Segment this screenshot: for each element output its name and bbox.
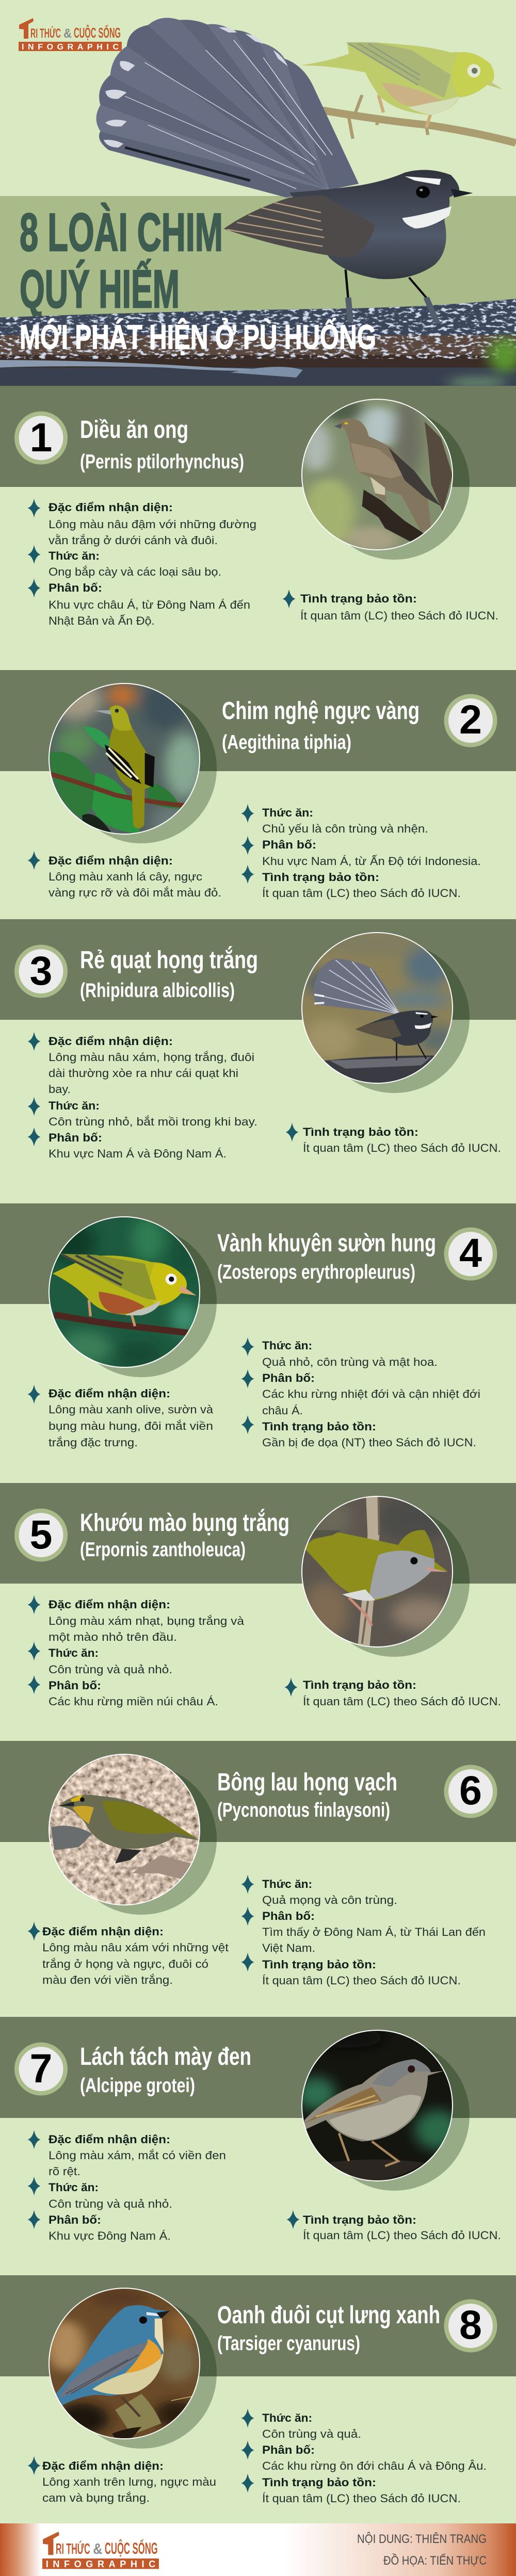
text: range: Phân bố: bbox=[49, 581, 102, 594]
text: identification: Đặc điểm nhận diện: bbox=[49, 1387, 170, 1400]
number badge 5: 5 bbox=[30, 1511, 52, 1557]
panel: species 7 bbox=[0, 2017, 516, 2242]
text: range bbox=[28, 579, 250, 627]
text: identification: Lông màu nâu đậm với những đường bbox=[49, 518, 256, 531]
illustration: white-eye bird on branch bbox=[299, 42, 516, 143]
band bbox=[0, 1203, 516, 1304]
text: conservation: Tình trạng bảo tồn: bbox=[262, 1958, 376, 1971]
tail fan bbox=[96, 18, 359, 198]
text: conservation bbox=[241, 1953, 461, 1987]
photo: white-bellied erpornis bbox=[302, 1497, 452, 1646]
text: identification: vằn trắng ở dưới cánh và đuôi. bbox=[49, 534, 218, 547]
logo: Tri thuc va Cuoc song infographic: & bbox=[63, 26, 72, 41]
panel: species 5 bbox=[0, 1483, 516, 1708]
text: food: Côn trùng và quả nhỏ. bbox=[49, 1663, 172, 1676]
text: food: Quả nhỏ, côn trùng và mật hoa. bbox=[262, 1356, 438, 1368]
text: range: Phân bố: bbox=[49, 2213, 101, 2226]
species name: Lách tách mày đen bbox=[80, 2043, 251, 2070]
logo: Tri thuc va Cuoc song infographic: RI THỨC bbox=[30, 25, 61, 41]
text: identification: Đặc điểm nhận diện: bbox=[49, 1598, 170, 1611]
text: identification: bay. bbox=[49, 1083, 71, 1096]
text: range: Khu vực Nam Á, từ Ấn Độ tới Indonesia. bbox=[262, 855, 481, 868]
text: conservation: Tình trạng bảo tồn: bbox=[262, 1420, 376, 1433]
text: range: châu Á. bbox=[262, 1404, 303, 1417]
text: range: Phân bố: bbox=[262, 838, 316, 851]
text: conservation bbox=[283, 589, 498, 622]
text: range bbox=[28, 2210, 171, 2242]
title line 3: MỚI PHÁT HIỆN Ở PÙ HUỐNG bbox=[20, 318, 376, 356]
number badge 3: 3 bbox=[30, 948, 52, 993]
text: food: Thức ăn: bbox=[262, 1878, 312, 1890]
text: range: Nhật Bản và Ấn Độ. bbox=[49, 614, 155, 627]
text: range: Khu vực Nam Á và Đông Nam Á. bbox=[49, 1147, 227, 1160]
text: food: Chủ yếu là côn trùng và nhện. bbox=[262, 822, 428, 835]
text: identification: một mào nhỏ trên đầu. bbox=[49, 1631, 177, 1643]
text: conservation: Tình trạng bảo tồn: bbox=[262, 2476, 376, 2489]
text: conservation: Tình trạng bảo tồn: bbox=[300, 592, 417, 605]
photo ring bbox=[49, 1217, 200, 1367]
text: food: Côn trùng và quả. bbox=[262, 2427, 361, 2440]
text: conservation bbox=[241, 1415, 476, 1449]
text: identification: trắng ở họng và ngực, đuôi có bbox=[42, 1958, 208, 1970]
number badge 4 bbox=[444, 1228, 497, 1280]
panel: footer bbox=[0, 2523, 516, 2576]
number badge 6: 6 bbox=[459, 1767, 482, 1813]
panel: species 2 bbox=[0, 670, 516, 900]
text: conservation: Ít quan tâm (LC) theo Sách đỏ IUCN. bbox=[300, 609, 498, 622]
text: food bbox=[28, 1641, 172, 1676]
text: identification bbox=[28, 851, 221, 899]
text: conservation bbox=[241, 865, 461, 900]
text: conservation bbox=[285, 1677, 501, 1708]
text: identification bbox=[28, 2456, 216, 2504]
credit: content: NỘI DUNG: THIÊN TRANG bbox=[357, 2532, 487, 2546]
text: conservation bbox=[241, 2474, 461, 2505]
species name: Bông lau họng vạch bbox=[217, 1769, 397, 1796]
panel: species 3 bbox=[0, 919, 516, 1160]
text: conservation bbox=[286, 1122, 501, 1154]
wing bbox=[224, 195, 375, 257]
photo ring bbox=[49, 683, 200, 834]
text: range: Khu vực châu Á, từ Đông Nam Á đến bbox=[49, 598, 250, 611]
text: identification bbox=[28, 1595, 245, 1643]
photo shadow bbox=[319, 2040, 470, 2191]
number badge 1: 1 bbox=[30, 414, 52, 460]
number badge 6 bbox=[444, 1765, 497, 1818]
number badge 7: 7 bbox=[30, 2045, 52, 2091]
photo: chestnut-flanked white-eye bbox=[50, 1217, 199, 1367]
latin name: (Pernis ptilorhynchus) bbox=[80, 451, 244, 473]
photo ring bbox=[49, 1754, 200, 1905]
text: conservation: Tình trạng bảo tồn: bbox=[303, 1126, 418, 1138]
text: identification: vàng rực rỡ và đôi mắt màu đỏ. bbox=[49, 886, 221, 899]
text: identification bbox=[28, 2130, 226, 2178]
latin name: (Zosterops erythropleurus) bbox=[217, 1261, 415, 1283]
photo: black-browed fulvetta bbox=[302, 2031, 452, 2180]
number badge 7 bbox=[14, 2043, 68, 2095]
species name: Khướu mào bụng trắng bbox=[80, 1508, 289, 1537]
number badge 8: 8 bbox=[459, 2302, 482, 2347]
text: identification: Lông màu xám nhạt, bụng trắng và bbox=[49, 1615, 245, 1627]
latin name: (Alcippe grotei) bbox=[80, 2075, 195, 2097]
text: identification bbox=[28, 1922, 229, 1986]
credit: graphics: ĐỒ HỌA: TIẾN THỰC bbox=[383, 2553, 487, 2568]
panel: header bbox=[0, 18, 516, 387]
text: conservation: Ít quan tâm (LC) theo Sách đỏ IUCN. bbox=[262, 2492, 461, 2505]
text: identification bbox=[28, 498, 256, 547]
species name: Vành khuyên sườn hung bbox=[217, 1230, 436, 1257]
number badge 5 bbox=[14, 1508, 68, 1562]
band bbox=[0, 2275, 516, 2376]
text: identification: Lông màu xanh olive, sườn và bbox=[49, 1403, 214, 1416]
text: food: Thức ăn: bbox=[49, 1099, 100, 1112]
text: food: Thức ăn: bbox=[49, 2181, 99, 2194]
text: food: Thức ăn: bbox=[49, 549, 100, 562]
illustration: white-throated fantail bbox=[96, 18, 473, 324]
footer background bbox=[0, 2523, 516, 2576]
title line 1: 8 LOÀI CHIM bbox=[20, 203, 223, 263]
text: conservation bbox=[287, 2210, 501, 2242]
header lower background bbox=[0, 196, 516, 386]
text: food: Thức ăn: bbox=[262, 806, 313, 819]
text: identification: trắng đặc trưng. bbox=[49, 1436, 138, 1449]
title line 2: QUÝ HIẾM bbox=[20, 259, 180, 319]
photo: red-flanked bluetail bbox=[46, 2287, 204, 2442]
text: food bbox=[241, 2409, 361, 2440]
text: food: Côn trùng và quả nhỏ. bbox=[49, 2197, 172, 2210]
latin name: (Erpornis zantholeuca) bbox=[80, 1539, 246, 1561]
panel: species 6 bbox=[0, 1741, 516, 1987]
number badge 1 bbox=[14, 412, 68, 464]
band bbox=[0, 1483, 516, 1584]
photo ring bbox=[302, 1496, 453, 1647]
latin name: (Tarsiger cyanurus) bbox=[217, 2333, 360, 2355]
number badge 2: 2 bbox=[459, 696, 482, 742]
text: conservation: Tình trạng bảo tồn: bbox=[303, 1678, 416, 1691]
text: identification: Lông màu xám, mắt có viền đen bbox=[49, 2149, 226, 2162]
text: food bbox=[28, 1097, 257, 1128]
logo: Tri thuc va Cuoc song infographic bbox=[19, 18, 122, 52]
text: identification: Lông xanh trên lưng, ngực màu bbox=[42, 2475, 216, 2488]
text: identification: rõ rệt. bbox=[49, 2165, 80, 2178]
text: range: Phân bố: bbox=[49, 1679, 101, 1692]
photo ring bbox=[302, 933, 453, 1083]
text: range bbox=[28, 1128, 227, 1160]
text: identification: Đặc điểm nhận diện: bbox=[49, 2133, 170, 2146]
text: range: Các khu rừng nhiệt đới và cận nhiệt đới bbox=[262, 1388, 480, 1400]
text: food: Thức ăn: bbox=[262, 1339, 312, 1352]
illustration: log and water bbox=[0, 298, 516, 387]
photo shadow bbox=[319, 1506, 470, 1657]
panel: species 1 bbox=[0, 386, 516, 627]
band bbox=[0, 919, 516, 1020]
text: identification: Đặc điểm nhận diện: bbox=[49, 854, 173, 867]
logo: footer: CUỘC SỐNG bbox=[105, 2539, 158, 2557]
species name: Chim nghệ ngực vàng bbox=[222, 697, 420, 725]
legs bbox=[346, 270, 438, 324]
photo: honey buzzard bbox=[302, 400, 452, 549]
text: range: Phân bố: bbox=[262, 1372, 315, 1384]
text: food bbox=[241, 1337, 438, 1368]
text: identification: Đặc điểm nhận diện: bbox=[49, 1035, 173, 1048]
text: identification: Đặc điểm nhận diện: bbox=[42, 1925, 164, 1938]
text: food bbox=[28, 2177, 172, 2210]
text: range bbox=[241, 2441, 487, 2472]
number badge 8 bbox=[444, 2300, 497, 2352]
text: identification: dài thường xòe ra như cái quạt khi bbox=[49, 1067, 238, 1080]
band bbox=[0, 2017, 516, 2118]
text: identification: Đặc điểm nhận diện: bbox=[49, 501, 173, 514]
text: range: Tìm thấy ở Đông Nam Á, từ Thái Lan đến bbox=[262, 1926, 486, 1938]
latin name: (Aegithina tiphia) bbox=[222, 731, 351, 754]
band bbox=[0, 386, 516, 487]
text: identification: Đặc điểm nhận diện: bbox=[42, 2459, 164, 2472]
photo shadow bbox=[66, 1227, 217, 1377]
text: conservation: Ít quan tâm (LC) theo Sách đỏ IUCN. bbox=[262, 1974, 461, 1987]
text: conservation: Tình trạng bảo tồn: bbox=[303, 2213, 416, 2226]
photo: white-throated fantail bbox=[302, 933, 452, 1083]
text: identification: màu đen với viền trắng. bbox=[42, 1974, 173, 1986]
text: conservation: Tình trạng bảo tồn: bbox=[262, 871, 379, 884]
photo shadow bbox=[66, 693, 217, 843]
text: range: Các khu rừng miền núi châu Á. bbox=[49, 1695, 218, 1708]
text: food: Thức ăn: bbox=[262, 2411, 312, 2424]
text: range: Phân bố: bbox=[262, 1910, 315, 1922]
head markings bbox=[402, 176, 473, 229]
logo: footer: & bbox=[93, 2540, 102, 2557]
photo ring bbox=[302, 399, 453, 550]
text: range bbox=[241, 836, 481, 868]
text: conservation: Gần bị đe dọa (NT) theo Sách đỏ IUCN. bbox=[262, 1436, 476, 1449]
text: identification: Lông màu xanh lá cây, ngực bbox=[49, 870, 202, 883]
text: identification: cam và bụng trắng. bbox=[42, 2491, 150, 2504]
text: range: Các khu rừng ôn đới châu Á và Đông Âu. bbox=[262, 2459, 487, 2472]
latin name: (Rhipidura albicollis) bbox=[80, 980, 235, 1002]
band bbox=[0, 1741, 516, 1842]
logo: footer: INFOGRAPHIC bbox=[46, 2559, 155, 2569]
logo: footer: RI THỨC bbox=[56, 2540, 90, 2557]
photo shadow bbox=[66, 2298, 217, 2449]
text: conservation: Ít quan tâm (LC) theo Sách đỏ IUCN. bbox=[262, 887, 461, 900]
text: identification bbox=[28, 1384, 214, 1449]
text: range bbox=[28, 1675, 218, 1708]
text: conservation: Ít quan tâm (LC) theo Sách đỏ IUCN. bbox=[303, 1695, 501, 1708]
photo ring bbox=[49, 2288, 200, 2439]
text: range: Khu vực Đông Nam Á. bbox=[49, 2229, 171, 2242]
text: range bbox=[241, 1906, 486, 1954]
number badge 3 bbox=[14, 945, 68, 998]
text: identification: Lông màu nâu xám, họng trắng, đuôi bbox=[49, 1051, 254, 1064]
text: food bbox=[241, 1874, 397, 1906]
band bbox=[0, 670, 516, 771]
logo: Tri thuc va Cuoc song infographic: CUỘC SỐNG bbox=[74, 24, 121, 41]
photo shadow bbox=[66, 1764, 217, 1915]
number badge 2 bbox=[444, 694, 497, 747]
logo: Tri thuc va Cuoc song infographic: INFOGRAPHIC bbox=[22, 43, 119, 52]
text: range bbox=[241, 1369, 480, 1417]
photo ring bbox=[302, 2030, 453, 2181]
text: range: Phân bố: bbox=[49, 1131, 102, 1144]
body bbox=[289, 170, 459, 279]
text: food: Ong bắp cày và các loại sâu bọ. bbox=[49, 565, 221, 578]
text: food: Quả mọng và côn trùng. bbox=[262, 1894, 397, 1906]
text: identification bbox=[28, 1032, 254, 1096]
text: range: Phân bố: bbox=[262, 2443, 315, 2456]
text: range: Việt Nam. bbox=[262, 1942, 315, 1954]
text: food bbox=[28, 545, 221, 578]
text: identification: bụng màu hung, đôi mắt viền bbox=[49, 1420, 213, 1432]
species name: Oanh đuôi cụt lưng xanh bbox=[217, 2302, 440, 2329]
photo shadow bbox=[319, 409, 470, 560]
text: conservation: Ít quan tâm (LC) theo Sách đỏ IUCN. bbox=[303, 2229, 501, 2242]
photo: common iora bbox=[50, 684, 199, 834]
panel: species 4 bbox=[0, 1203, 516, 1449]
photo shadow bbox=[319, 942, 470, 1093]
logo: footer bbox=[42, 2532, 159, 2569]
text: identification: Lông màu nâu xám với những vệt bbox=[42, 1941, 229, 1954]
species name: Diều ăn ong bbox=[80, 416, 188, 444]
text: food: Côn trùng nhỏ, bắt mồi trong khi bay. bbox=[49, 1115, 257, 1128]
photo: stripe-throated bulbul bbox=[50, 1755, 199, 1904]
latin name: (Pycnonotus finlaysoni) bbox=[217, 1799, 390, 1821]
species name: Rẻ quạt họng trắng bbox=[80, 945, 258, 974]
text: conservation: Ít quan tâm (LC) theo Sách đỏ IUCN. bbox=[303, 1142, 501, 1154]
text: food: Thức ăn: bbox=[49, 1646, 99, 1659]
text: food bbox=[241, 804, 428, 835]
number badge 4: 4 bbox=[459, 1230, 482, 1276]
panel: species 8 bbox=[0, 2275, 516, 2505]
